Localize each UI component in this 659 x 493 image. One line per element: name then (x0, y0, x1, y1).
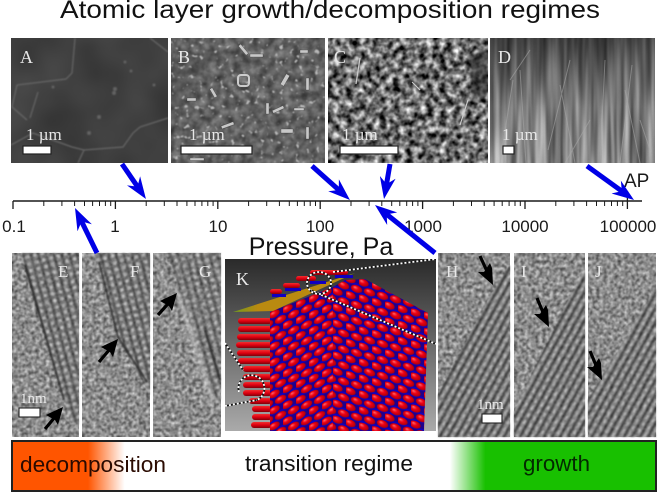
panel label E: E (58, 262, 68, 281)
panel G: TEM decomposition (153, 253, 221, 437)
AP label: AP (624, 171, 649, 192)
transition label: transition regime (245, 451, 413, 476)
panel H: TEM growth (438, 253, 510, 437)
axis title: Pressure, Pa (249, 233, 393, 261)
panel C: rough SEM surface (328, 38, 488, 163)
scale bar H (482, 414, 502, 423)
panel label C: C (334, 47, 346, 67)
scale bar E (19, 408, 40, 417)
tick labels: 10000 (501, 217, 549, 236)
arrow E (45, 407, 63, 429)
scale label E: 1nm (20, 391, 47, 407)
panel label J: J (595, 262, 602, 281)
panel K: 3D crystal model (225, 259, 436, 431)
arrow: image H pressure (383, 211, 435, 253)
scale bar A (23, 146, 51, 154)
growth label: growth (523, 451, 590, 476)
tick labels: 100000 (600, 217, 656, 236)
arrow: image C pressure (386, 164, 390, 189)
regime bar (12, 441, 656, 491)
left crystal face (270, 287, 333, 431)
arrow H (478, 256, 493, 285)
top plane (233, 273, 355, 312)
blue arrows linking images to pressures (79, 164, 626, 253)
panel label K: K (236, 269, 249, 289)
panel F: TEM decomposition (82, 253, 150, 437)
arrow: image E pressure (79, 217, 97, 253)
arrow I (534, 298, 549, 327)
tick labels: 0.1 (2, 217, 26, 236)
scale label C: 1 µm (342, 125, 378, 144)
arrow: image B pressure (312, 166, 342, 193)
panel J: TEM growth (587, 253, 656, 437)
tick labels: 10 (209, 217, 227, 236)
right crystal face (333, 279, 428, 431)
panel label F: F (130, 262, 139, 281)
arrow F (99, 339, 118, 362)
top rods (270, 270, 353, 297)
panel E: TEM decomposition (12, 253, 79, 437)
scale bar B (181, 146, 252, 154)
arrow G (158, 293, 177, 315)
zoom callout lines (225, 259, 436, 406)
panel A: smooth SEM surface (11, 38, 168, 163)
tick labels: 1 (110, 217, 120, 236)
panel label D: D (498, 47, 511, 67)
tick labels: 100 (306, 217, 334, 236)
panel I: TEM growth (514, 253, 585, 437)
arrow J (587, 351, 602, 380)
panel label A: A (20, 47, 33, 67)
decomposition label: decomposition (20, 452, 166, 477)
panel label H: H (446, 262, 458, 281)
pressure axis (2, 171, 656, 236)
panel label B: B (178, 47, 190, 67)
panel D: nanowire SEM (490, 38, 655, 163)
panel label G: G (199, 262, 211, 281)
tick labels (2, 217, 656, 236)
scale label B: 1 µm (189, 125, 225, 144)
arrow: image A pressure (122, 164, 140, 191)
scale bar D (503, 146, 514, 154)
scale label A: 1 µm (26, 125, 62, 144)
scale label H: 1nm (477, 397, 504, 413)
scale bar C (340, 146, 398, 154)
scale label D: 1 µm (502, 125, 538, 144)
arrow: image D pressure (587, 166, 626, 194)
panel label I: I (521, 262, 527, 281)
panel B: SEM islands (171, 38, 325, 163)
left side rods (236, 318, 272, 428)
tick labels: 1000 (404, 217, 442, 236)
